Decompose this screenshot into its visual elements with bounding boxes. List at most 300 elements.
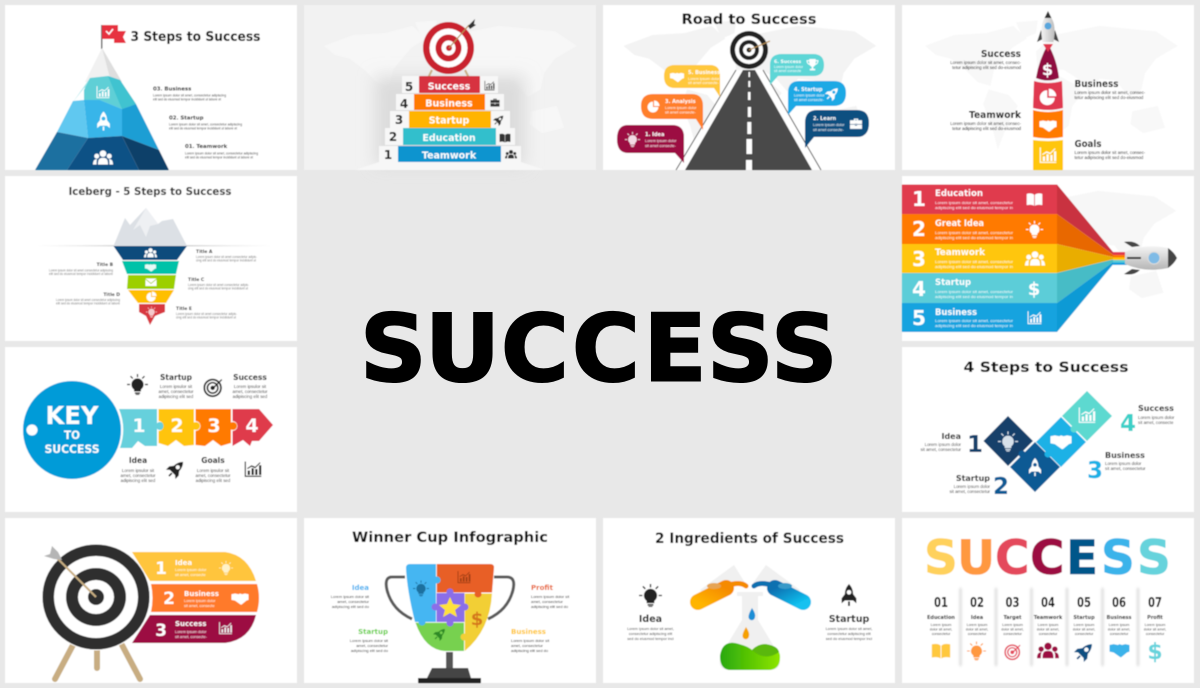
text: startup: Startup <box>160 373 193 382</box>
colourful word: S <box>1137 531 1171 586</box>
column 01 <box>927 596 955 658</box>
startup block <box>826 584 872 641</box>
band 1: education: Lorem ipsum dolor sit amet, consectetur <box>935 200 1014 205</box>
bar: business: Business <box>425 98 473 110</box>
segment: goals <box>1033 140 1063 170</box>
band 1: education <box>902 184 1057 214</box>
label: idea <box>920 432 983 458</box>
label: success: 4 <box>1120 411 1136 437</box>
callout: idea <box>617 125 684 163</box>
step numbers: 1 <box>384 148 392 162</box>
callout: business <box>664 65 720 97</box>
label: startup: amet, consectetur <box>356 643 389 648</box>
title: Winner Cup Infographic <box>352 530 548 546</box>
column 02: Idea <box>971 615 983 621</box>
column 03: Target <box>1004 615 1022 621</box>
callout: success: sit amet consecte <box>774 69 801 73</box>
key tabs: 2 <box>170 415 184 437</box>
label: idea: Idea <box>352 584 369 592</box>
column 07: dolor sit amet, <box>1144 628 1166 632</box>
column 07: Profit <box>1147 615 1163 621</box>
column 06: dolor sit amet, <box>1108 628 1130 632</box>
band 3: teamwork: Lorem ipsum dolor sit amet, consectetur <box>935 259 1014 264</box>
label: title A: Title A <box>196 249 213 255</box>
callout: success <box>770 54 824 85</box>
world map <box>624 20 876 150</box>
column 03: consectetur <box>1003 632 1023 636</box>
colourful word: U <box>957 531 995 586</box>
label: title E: Lorem ipsum dolor sit amet consectetur adipis- <box>176 312 237 316</box>
label: profit: adipiscing elit sed do <box>531 604 569 609</box>
text: success <box>950 49 1022 70</box>
column 01: Lorem ipsum <box>931 623 951 627</box>
label: success: sit amet, consecte <box>1138 420 1174 425</box>
world map <box>324 20 577 150</box>
segment: business <box>1033 81 1063 110</box>
label: success: Lorem ipsum dolor <box>1138 415 1175 420</box>
band: business: Lorem ipsum dolor <box>184 599 216 603</box>
text: success: tetur adipiscing elit sed do-eiusmod <box>952 65 1022 70</box>
band: success: Lorem ipsum dolor <box>175 630 207 634</box>
callout: startup: sit amet consecte- <box>794 98 825 102</box>
column 04 <box>1034 596 1063 658</box>
label: title C: Title C <box>188 277 205 283</box>
label: title A <box>196 249 257 262</box>
label: title C: Lorem ipsum dolor sit amet consectetur adipis- <box>188 283 249 287</box>
column 04: Lorem ipsum <box>1038 623 1058 627</box>
label: profit <box>531 584 570 609</box>
column 03: Lorem ipsum <box>1002 623 1023 627</box>
white steps <box>355 76 545 170</box>
label: title E: Title E <box>176 306 192 312</box>
text: success <box>233 373 268 399</box>
band 1: education: 1 <box>912 187 926 211</box>
title: 2 Ingredients of Success <box>655 531 844 547</box>
label: startup <box>949 474 1009 500</box>
icons: bulb, target, rocket, chart <box>127 374 261 481</box>
step icons <box>484 81 517 158</box>
band 1: education: adipiscing elit sed do eiusmod tempor in <box>935 205 1013 210</box>
band 5: business: Lorem ipsum dolor sit amet, consectetur <box>935 318 1014 323</box>
callout: idea: 1. Idea <box>645 132 664 138</box>
colourful word: C <box>995 531 1030 586</box>
text: goals: Lorem ipsulor sit <box>197 468 230 473</box>
text: startup: amet, consectetur <box>159 389 194 394</box>
text: business: Business <box>1074 79 1119 90</box>
step numbers: 2 <box>389 130 397 144</box>
band: business: Business <box>184 590 219 598</box>
callout: business: sit amet consecte- <box>688 81 720 85</box>
callout: success: 6. Success <box>774 59 801 65</box>
text: success: Lorem ipsulor sit <box>234 384 267 389</box>
panel: key to success <box>5 347 297 512</box>
label: title D <box>56 292 120 306</box>
column 07: Lorem ipsum <box>1145 623 1165 627</box>
key head <box>22 380 122 480</box>
colourful word: S <box>924 531 958 586</box>
target <box>730 31 770 69</box>
text: business <box>1074 79 1146 100</box>
column 03: 03 <box>1006 596 1020 611</box>
label: business: adipiscing elit sed do <box>511 648 549 653</box>
bar: education: Education <box>422 133 476 144</box>
step numbers: 3 <box>395 113 403 127</box>
text: startup: Lorem ipsulor sit <box>160 384 193 389</box>
layer: yellow <box>128 290 174 303</box>
panel: 3 steps to success mountain <box>5 5 297 170</box>
bar: teamwork: Teamwork <box>422 150 477 162</box>
panel: winner cup <box>304 518 596 683</box>
title: 3 Steps to Success <box>130 29 260 45</box>
text: teamwork: elit sed do eiusmod tempor incididunt ut labore et <box>185 156 253 160</box>
column 05: consectetur <box>1075 632 1094 636</box>
label: title B <box>49 262 114 276</box>
column 06 <box>1107 596 1132 657</box>
right test tube <box>753 565 803 602</box>
band 2: great idea: 2 <box>912 217 926 241</box>
callout: analysis: 3. Analysis <box>665 99 696 105</box>
chart: layered mountain <box>35 48 169 170</box>
text: teamwork: Lorem ipsum dolor sit amet, consec- <box>950 121 1022 126</box>
key head: KEY <box>46 401 99 430</box>
label: business: Business <box>1105 451 1145 460</box>
text: business: Lorem ipsum dolor sit amet, consec- <box>1074 90 1146 95</box>
label: title D: Title D <box>103 292 120 298</box>
icon: rocket <box>1124 242 1177 274</box>
title: Iceberg - 5 Steps to Success <box>68 186 232 198</box>
icon: red flag <box>101 25 126 49</box>
label: business: 3 <box>1087 458 1103 484</box>
startup block: Lorem ipsum dolor sit amet, <box>826 627 872 631</box>
band 3: teamwork <box>902 244 1057 273</box>
startup block: sed do eiusmod tempor inci <box>826 637 872 641</box>
text: business: tetur adipiscing elit sed do-eiusmod <box>1074 95 1144 100</box>
column 05: Startup <box>1073 615 1095 621</box>
step numbers: 5 <box>405 80 413 94</box>
label: title D: elit sed do eiusmod tempor incididunt ut labore <box>56 302 120 306</box>
label: profit: amet, consectetur <box>531 599 563 604</box>
flask <box>720 592 780 670</box>
label: idea: Lorem ipsum dolor <box>925 442 962 447</box>
band: success: Success <box>175 620 206 628</box>
band 4: startup: adipiscing elit sed do eiusmod tempor in <box>935 294 1013 299</box>
text: startup: elit sed do eiusmod tempor incididunt ut labore et <box>169 126 237 130</box>
column 05: dolor sit amet, <box>1073 628 1095 632</box>
band 5: business: adipiscing elit sed do eiusmod tempor in <box>935 323 1013 328</box>
text: goals <box>1074 139 1146 160</box>
idea block <box>627 584 674 641</box>
panel: target with three bands <box>5 518 297 683</box>
layer: navy <box>114 246 187 260</box>
panel: 4 steps to success <box>902 347 1194 512</box>
key tabs: 4 <box>245 415 259 437</box>
callout: analysis: Lorem ipsum dolor <box>665 106 697 110</box>
panel: success seven columns <box>902 518 1194 683</box>
icon: chart <box>97 86 109 98</box>
panel: road to success <box>603 5 895 170</box>
column 02: dolor sit amet, <box>966 628 988 632</box>
label: success: Success <box>1138 404 1174 413</box>
step numbers <box>384 80 413 162</box>
callout: startup: 4. Startup <box>794 87 823 93</box>
text: success: Lorem ipsum dolor sit amet, consec- <box>950 60 1022 65</box>
callout: startup: Lorem ipsum dolor <box>794 94 825 98</box>
trophy <box>386 564 514 683</box>
icon: team <box>93 150 113 164</box>
column 05: 05 <box>1077 596 1091 611</box>
segment: success <box>1036 44 1059 80</box>
key tabs <box>119 409 273 448</box>
panel: rocket tower <box>902 5 1194 170</box>
column 04: consectetur <box>1039 632 1058 636</box>
label: title C <box>188 277 249 290</box>
left test tube <box>698 565 746 602</box>
column 04: 04 <box>1041 596 1055 611</box>
label: title E: cing elit sed do eiusmod tempor incididunt ut <box>176 316 236 320</box>
callout: learn: 2. Learn <box>813 116 837 122</box>
text: startup: adipiscing elit sed <box>159 394 194 399</box>
band 4: startup: Lorem ipsum dolor sit amet, consectetur <box>935 289 1014 294</box>
text: teamwork: tetur adipiscing elit sed do-eiusmod <box>952 126 1022 131</box>
band 1: education: Education <box>935 189 983 199</box>
colourful word: C <box>1030 531 1064 586</box>
idea block: consectetur adipiscing elit <box>629 632 673 636</box>
band 5: business: 5 <box>912 306 926 330</box>
label: startup: 2 <box>993 474 1009 500</box>
label: startup: adipiscing elit sed do <box>351 648 389 653</box>
column 05 <box>1072 596 1097 664</box>
text: business: 03. Business <box>153 86 191 92</box>
label: title C: cing elit sed do eiusmod tempor incididunt ut <box>188 286 248 290</box>
label: idea: adipiscing elit sed do <box>332 604 370 609</box>
column 07: consectetur <box>1146 632 1165 636</box>
column 01: 01 <box>934 596 948 611</box>
label: business <box>1087 451 1146 484</box>
label: business: sit amet, consectetur <box>1105 466 1146 471</box>
text: goals: Goals <box>1074 139 1102 150</box>
label: idea: sit amet, consectetur <box>920 447 962 452</box>
road <box>676 70 822 170</box>
label: business: amet, consectetur <box>511 643 543 648</box>
label: idea: Idea <box>941 432 961 441</box>
label: title B: Title B <box>97 262 114 268</box>
text: goals: adipiscing elit sed <box>196 478 231 483</box>
band 5: business: Business <box>935 308 977 318</box>
label: business: Business <box>511 628 546 636</box>
text: teamwork <box>185 144 258 160</box>
label: startup: Startup <box>358 628 388 636</box>
label: title B: elit sed do eiusmod tempor incididunt ut labore <box>49 272 113 276</box>
icon: rocket <box>1037 11 1059 42</box>
callout: idea: Lorem ipsum dolor <box>645 139 677 143</box>
text: goals: tetur adipiscing elit sed do-eiusmod <box>1074 155 1144 160</box>
callout: learn <box>805 110 869 148</box>
key head: SUCCESS <box>44 442 100 456</box>
label: idea <box>331 584 370 609</box>
text: teamwork: 01. Teamwork <box>185 144 228 150</box>
puzzle check mark <box>984 391 1112 492</box>
band 5: business <box>902 303 1057 332</box>
label: startup: Startup <box>956 474 990 483</box>
bar: business <box>414 94 485 110</box>
label: startup <box>350 628 389 653</box>
main heading: SUCCESS <box>360 295 838 403</box>
callout: success: Lorem ipsum dolor <box>774 65 804 69</box>
layer: green <box>127 275 176 289</box>
text: teamwork <box>950 110 1022 131</box>
bar: startup: Startup <box>429 116 469 126</box>
title: Road to Success <box>682 12 816 28</box>
column 02 <box>966 596 988 660</box>
panel: rocket funnel <box>902 176 1194 341</box>
icon: rocket <box>97 112 110 130</box>
text: goals <box>196 456 231 483</box>
callout: analysis: sit amet consecte- <box>665 110 697 114</box>
callout: learn: Lorem ipsum dolor <box>813 123 845 127</box>
label: business <box>511 628 550 653</box>
key tabs: 1 <box>132 415 146 437</box>
startup block: Startup <box>829 614 869 625</box>
column 03: dolor sit amet, <box>1001 628 1024 632</box>
callout: business: 5. Business <box>688 70 720 76</box>
label: success <box>1120 404 1175 437</box>
band 4: startup <box>902 273 1057 303</box>
text: idea: Lorem ipsulor sit <box>122 468 155 473</box>
text: idea: adipiscing elit sed <box>121 478 156 483</box>
callout: idea: sit amet consecte- <box>645 144 677 148</box>
text: idea <box>121 456 156 483</box>
column 07 <box>1144 596 1166 665</box>
band 4: startup: Startup <box>935 278 971 288</box>
band 3: teamwork: 3 <box>912 247 926 271</box>
band: success: 3 <box>155 621 167 641</box>
callout: learn: sit amet consecte- <box>813 128 845 132</box>
iceberg top <box>114 208 187 246</box>
band: business: 2 <box>163 589 175 609</box>
colourful word: E <box>1066 531 1098 586</box>
column 02: consectetur <box>968 632 987 636</box>
colourful word: S <box>1101 531 1135 586</box>
column 03 <box>1001 596 1024 659</box>
band: idea: sit amet, consecte <box>175 573 206 577</box>
band 2: great idea: adipiscing elit sed do eiusmod tempor in <box>935 235 1013 240</box>
column shadows <box>960 588 1139 666</box>
text: business <box>153 86 226 102</box>
column 01: consectetur <box>932 632 951 636</box>
label: startup: Lorem ipsum dolor sit <box>350 638 389 643</box>
bar: teamwork <box>398 146 501 162</box>
band: idea: 1 <box>155 559 167 579</box>
band: idea <box>132 552 256 581</box>
band 3: teamwork: Teamwork <box>935 248 985 258</box>
column 07: 07 <box>1148 596 1162 611</box>
text: teamwork: Teamwork <box>969 110 1021 121</box>
column 04: Teamwork <box>1034 615 1063 621</box>
target <box>42 544 150 650</box>
text: idea: Idea <box>129 456 147 465</box>
text: goals: Lorem ipsum dolor sit amet, consec- <box>1074 150 1146 155</box>
text: success: Success <box>233 373 267 382</box>
band: idea: Lorem ipsum dolor <box>175 568 207 572</box>
callout: startup <box>788 81 846 115</box>
text: startup <box>159 373 194 399</box>
callout: analysis <box>641 94 703 130</box>
key head: TO <box>64 428 80 442</box>
text: goals: Goals <box>201 456 225 465</box>
funnel to rocket <box>1057 184 1127 332</box>
band 2: great idea: Great Idea <box>935 219 984 229</box>
target on stand <box>423 19 476 78</box>
band: success: sit amet, consecte- <box>175 635 208 639</box>
panel: 2 ingredients <box>603 518 895 683</box>
stair shadow <box>375 76 525 166</box>
column 06: Lorem ipsum <box>1109 623 1129 627</box>
label: startup: Lorem ipsum dolor <box>954 484 991 489</box>
horizon line <box>35 245 273 246</box>
text: business: elit sed do eiusmod tempor incididunt ut labore et <box>153 98 221 102</box>
label: profit: Lorem ipsum dolor sit <box>531 594 570 599</box>
band 2: great idea: Lorem ipsum dolor sit amet, consectetur <box>935 230 1014 235</box>
startup block: consectetur adipiscing elit <box>827 632 872 636</box>
column 02: 02 <box>970 596 984 611</box>
idea block: sed do eiusmod tempor inci <box>627 637 674 641</box>
text: startup <box>169 116 242 130</box>
band 2: great idea <box>902 214 1057 244</box>
column 05: Lorem ipsum <box>1074 623 1094 627</box>
column 02: Lorem ipsum <box>967 623 987 627</box>
layer: teal <box>122 261 179 274</box>
world map <box>925 20 1178 150</box>
idea block: Idea <box>639 614 662 625</box>
text: success: adipiscing elit sed <box>233 394 268 399</box>
trophy: $ <box>471 609 483 630</box>
column 07: $ <box>1147 640 1163 665</box>
label: idea: amet, consectetur <box>337 599 370 604</box>
band: success <box>132 615 256 643</box>
bar: success: Success <box>428 82 471 92</box>
band: business <box>151 584 259 612</box>
column 01: dolor sit amet, <box>930 628 952 632</box>
band 3: teamwork: adipiscing elit sed do eiusmod tempor in <box>935 264 1013 269</box>
idea block: Lorem ipsum dolor sit amet, <box>627 627 674 631</box>
arrow <box>44 546 96 597</box>
bar: education <box>403 128 496 145</box>
panel: iceberg <box>5 176 297 341</box>
band: business: sit amet, consecte <box>184 604 215 608</box>
text: goals: amet, consectetur <box>196 473 231 478</box>
column 04: dolor sit amet, <box>1037 628 1059 632</box>
text: idea: amet, consectetur <box>121 473 156 478</box>
segment: success: $ <box>1042 60 1053 79</box>
text: teamwork: Lorem ipsum dolor sit amet, consectetur adipiscing <box>185 152 258 156</box>
column 06: consectetur <box>1110 632 1129 636</box>
label: business: Lorem ipsum dolor sit <box>511 638 550 643</box>
label: title E <box>176 306 237 320</box>
label: title A: Lorem ipsum dolor sit amet consectetur adipis- <box>196 255 257 259</box>
key tabs: 3 <box>207 415 221 437</box>
layer: red <box>139 304 165 325</box>
step numbers: 4 <box>400 97 408 111</box>
band 4: startup: $ <box>1028 279 1040 300</box>
column 06: 06 <box>1112 596 1126 611</box>
text: startup: 02. Startup <box>169 116 204 122</box>
segment: teamwork <box>1033 110 1063 138</box>
label: startup: sit amet, consectetur <box>949 489 991 494</box>
text: success: amet, consectetur <box>233 389 268 394</box>
label: business: Lorem ipsum dolor <box>1105 461 1142 466</box>
callout: business: Lorem ipsum dolor <box>688 77 720 81</box>
panel: stairs to target <box>304 5 596 170</box>
